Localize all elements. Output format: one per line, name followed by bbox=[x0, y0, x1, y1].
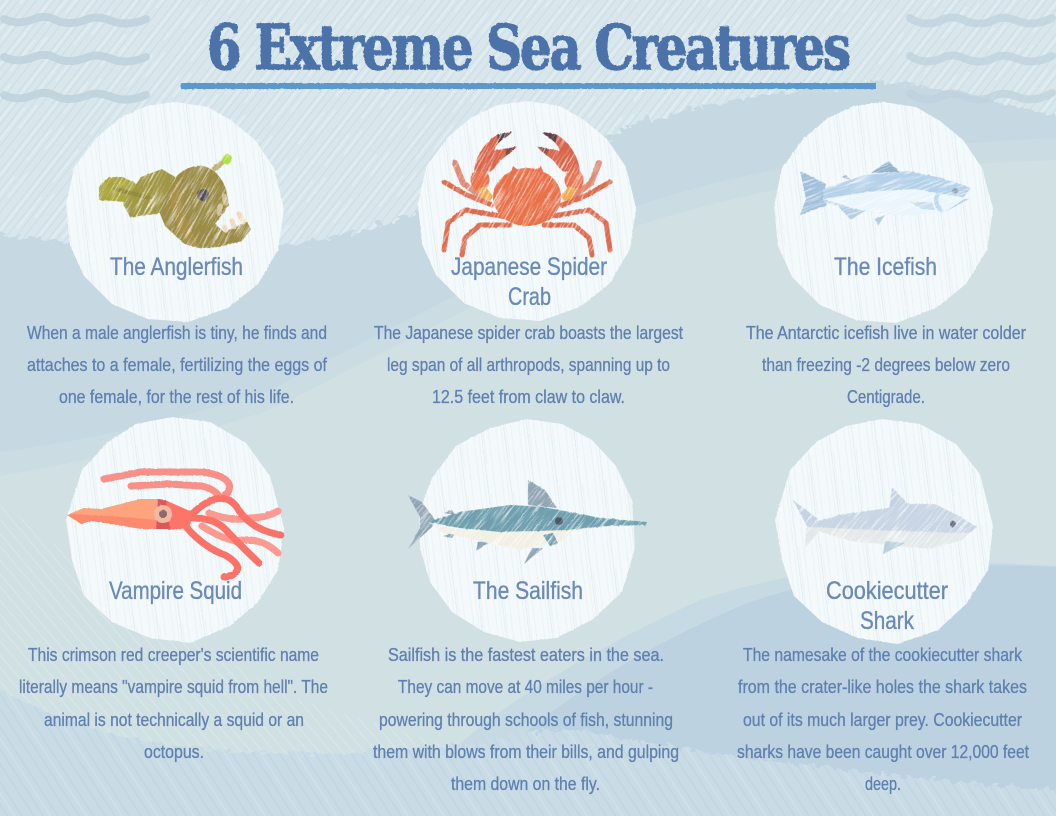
description: The namesake of the cookiecutter shark bbox=[743, 645, 1023, 665]
heading: Cookiecutter bbox=[826, 577, 948, 605]
description bbox=[737, 645, 1029, 794]
description: Centigrade. bbox=[847, 387, 925, 407]
panel: vampire squid bbox=[19, 417, 328, 762]
description: They can move at 40 miles per hour - bbox=[398, 677, 653, 697]
icon: icefish bbox=[779, 106, 992, 281]
description bbox=[746, 323, 1026, 407]
description: attaches to a female, fertilizing the eggs of bbox=[27, 355, 328, 375]
icon: anglerfish bbox=[58, 88, 292, 314]
icon: cookiecutter shark bbox=[760, 396, 1010, 645]
circle backdrop bbox=[418, 101, 636, 321]
description: one female, for the rest of his life. bbox=[59, 387, 294, 407]
heading bbox=[451, 253, 607, 311]
icon: sailfish bbox=[367, 362, 688, 682]
description: than freezing -2 degrees below zero bbox=[762, 355, 1010, 375]
icon: vampire squid bbox=[67, 472, 281, 577]
description: out of its much larger prey. Cookiecutter bbox=[743, 710, 1022, 730]
heading: Shark bbox=[860, 607, 914, 635]
description: literally means "vampire squid from hell". The bbox=[19, 677, 328, 697]
description bbox=[373, 645, 679, 794]
description: deep. bbox=[865, 774, 901, 794]
circle backdrop bbox=[66, 102, 284, 322]
description: When a male anglerfish is tiny, he finds and bbox=[27, 323, 327, 343]
circle backdrop bbox=[66, 417, 284, 643]
panel: japanese spider crab bbox=[374, 60, 683, 407]
description: from the crater-like holes the shark takes bbox=[738, 677, 1027, 697]
description: 12.5 feet from claw to claw. bbox=[432, 387, 625, 407]
panel: anglerfish bbox=[27, 88, 328, 407]
heading: Vampire Squid bbox=[109, 577, 242, 605]
panel: icefish bbox=[746, 102, 1026, 407]
description: powering through schools of fish, stunning bbox=[379, 710, 673, 730]
description: animal is not technically a squid or an bbox=[44, 710, 304, 730]
description: Sailfish is the fastest eaters in the sea. bbox=[388, 645, 664, 665]
title underline bbox=[181, 83, 876, 89]
heading: The Anglerfish bbox=[110, 253, 243, 281]
description: them with blows from their bills, and gulping bbox=[373, 742, 679, 762]
heading: Japanese Spider bbox=[451, 253, 607, 281]
description: The Antarctic icefish live in water colder bbox=[746, 323, 1026, 343]
heading bbox=[826, 577, 948, 635]
description: them down on the fly. bbox=[451, 774, 600, 794]
description bbox=[27, 323, 328, 407]
description bbox=[374, 323, 683, 407]
description: octopus. bbox=[144, 742, 204, 762]
circle backdrop bbox=[775, 419, 993, 644]
heading: The Icefish bbox=[834, 253, 937, 281]
description: This crimson red creeper's scientific name bbox=[28, 645, 319, 665]
heading: Crab bbox=[508, 283, 551, 311]
description: The Japanese spider crab boasts the largest bbox=[374, 323, 683, 343]
heading: The Sailfish bbox=[473, 577, 583, 605]
panel: cookiecutter shark bbox=[737, 396, 1029, 794]
circle backdrop bbox=[419, 419, 635, 642]
description: leg span of all arthropods, spanning up to bbox=[387, 355, 670, 375]
wave decoration: top right bbox=[910, 17, 1052, 100]
circle backdrop bbox=[774, 102, 993, 323]
description bbox=[19, 645, 328, 762]
title: 6 Extreme Sea Creatures bbox=[207, 12, 851, 84]
wave decoration: top left bbox=[4, 17, 146, 99]
icon: crab bbox=[391, 60, 663, 327]
panel: sailfish bbox=[367, 362, 688, 794]
